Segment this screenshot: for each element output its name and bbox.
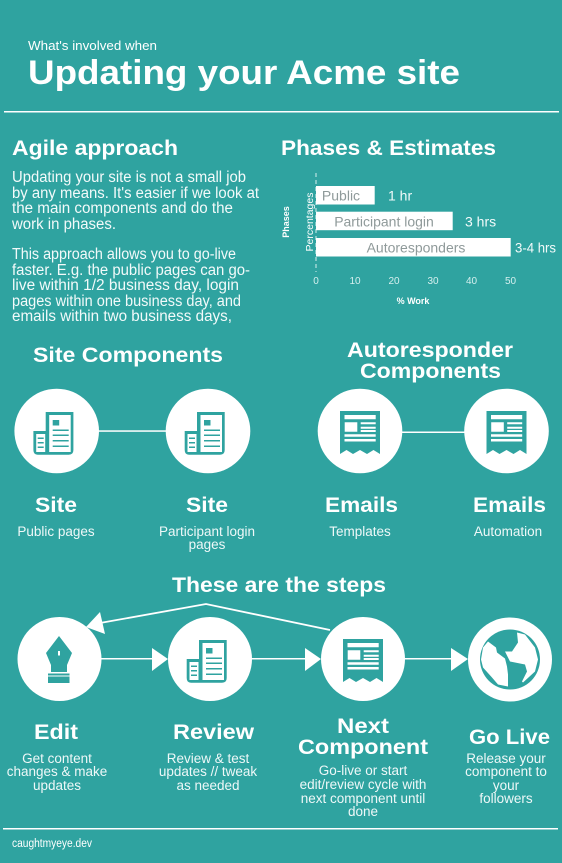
step: go live: Go Live: [469, 726, 550, 749]
step: review: as needed: [176, 778, 240, 793]
step: edit: Edit: [34, 721, 78, 744]
text block: agile description: faster. E.g. the public pages can go-: [12, 262, 250, 279]
icon: review document: [168, 617, 252, 701]
text block: agile description: live within 1/2 business day, login: [12, 277, 239, 294]
step: go live: your: [493, 778, 520, 793]
step: next component: [298, 715, 428, 819]
bar: public: 1 hr: [388, 188, 412, 204]
arrow: next component to go live: [404, 648, 468, 671]
label: emails automation: [473, 494, 546, 539]
axis labels: 10: [349, 276, 361, 287]
step: go live: [465, 726, 550, 806]
text block: agile description: work in phases.: [11, 216, 116, 233]
panel: phases and estimates: [281, 137, 556, 306]
step: next component: next component until: [301, 791, 425, 806]
text block: agile description: by any means. It's easier if we look at: [12, 185, 260, 202]
heading: phases and estimates: Phases & Estimates: [281, 137, 496, 160]
arrow: review to next component: [250, 648, 321, 671]
bar: public: [316, 186, 412, 204]
step: next component: Component: [298, 736, 428, 759]
text block: agile description: the main components and do the: [12, 200, 233, 217]
bar: participant login: [316, 212, 496, 230]
label: site participant login: Participant login: [159, 524, 255, 539]
step: edit: Get content: [22, 751, 92, 766]
step: go live: followers: [479, 791, 533, 806]
step: review: Review & test: [167, 751, 250, 766]
bar: participant login: 3 hrs: [465, 214, 496, 230]
step: edit: updates: [33, 778, 81, 793]
icon: email templates: [318, 389, 402, 473]
label: site public pages: Public pages: [17, 524, 95, 539]
axis labels: 50: [505, 276, 516, 287]
main title: Updating your Acme site: [28, 54, 460, 92]
step: next component: Next: [337, 715, 389, 738]
bar: autoresponders: 3-4 hrs: [515, 240, 556, 256]
step: edit: [7, 721, 107, 793]
heading: autoresponder components: [347, 339, 513, 383]
axis labels: % Work: [397, 296, 430, 306]
step: review: updates // tweak: [159, 764, 257, 779]
icon: site public pages: [14, 389, 99, 473]
heading: autoresponder components: Components: [360, 360, 501, 383]
axis labels: 0: [313, 276, 319, 287]
icon: next component news: [321, 617, 405, 701]
axis labels: [281, 193, 516, 306]
axis labels: 20: [388, 276, 400, 287]
label: site public pages: Site: [35, 494, 77, 517]
bar: autoresponders: [316, 238, 556, 256]
icon: globe: [468, 618, 552, 702]
label: emails templates: Emails: [325, 494, 398, 517]
step: go live: component to: [465, 764, 547, 779]
bar: autoresponders: Autoresponders: [367, 240, 465, 256]
bar: participant login: Participant login: [334, 214, 434, 230]
text block: agile description: This approach allows you to go-live: [12, 246, 236, 263]
step: go live: Release your: [466, 751, 546, 766]
connector: site components: [95, 430, 170, 432]
step: edit: changes & make: [7, 764, 107, 779]
arrow: return loop to edit: [86, 604, 330, 634]
label: site participant login: [159, 494, 255, 552]
connector: autoresponder components: [398, 432, 468, 433]
text block: agile description: pages within one business day, and: [12, 293, 241, 310]
bar: public: Public: [322, 188, 360, 204]
text block: agile description: Updating your site is not a small job: [12, 169, 246, 186]
axis labels: 40: [466, 276, 477, 287]
icon: email automation: [464, 389, 549, 473]
label: emails templates: [325, 494, 398, 539]
axis labels: Phases: [281, 206, 291, 238]
label: site public pages: [17, 494, 95, 539]
heading: autoresponder components: Autoresponder: [347, 339, 513, 362]
panel: agile approach: [11, 137, 260, 325]
label: emails automation: Automation: [474, 524, 542, 539]
heading: these are the steps: These are the steps: [172, 574, 386, 597]
bar chart: [281, 173, 556, 306]
heading: site components: Site Components: [33, 344, 223, 367]
step: next component: edit/review cycle with: [300, 777, 426, 792]
icon: pen nib: [18, 617, 102, 701]
footer: caughtmyeye.dev: [12, 838, 92, 850]
axis labels: Percentages: [304, 193, 316, 251]
eyebrow text: What's involved when: [28, 38, 157, 53]
arrow: edit to review: [100, 648, 168, 671]
icon: site participant login pages: [166, 389, 250, 473]
text block: agile description: [11, 169, 260, 325]
heading: agile approach: Agile approach: [12, 137, 178, 160]
step: review: Review: [173, 721, 255, 744]
text block: agile description: emails within two business days,: [12, 308, 232, 325]
step: next component: done: [348, 804, 378, 819]
label: emails templates: Templates: [329, 524, 391, 539]
step: next component: Go-live or start: [319, 763, 408, 778]
label: site participant login: pages: [189, 537, 226, 552]
label: site participant login: Site: [186, 494, 228, 517]
title block: [28, 38, 460, 92]
label: emails automation: Emails: [473, 494, 546, 517]
axis labels: 30: [427, 276, 439, 287]
step: review: [159, 721, 257, 793]
